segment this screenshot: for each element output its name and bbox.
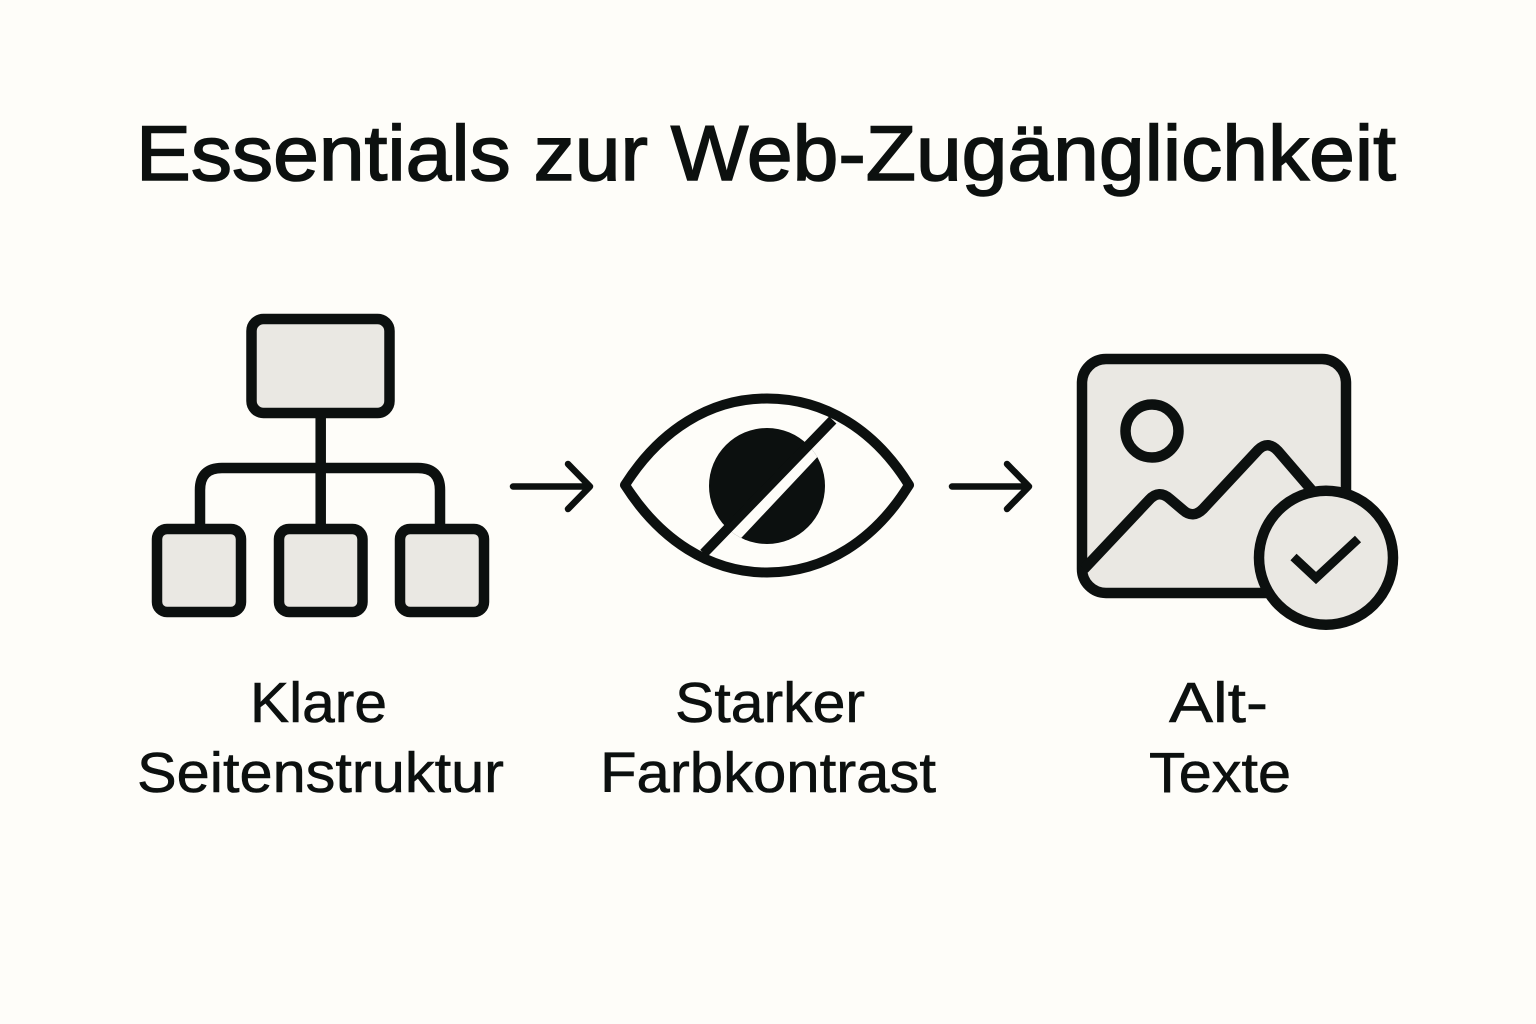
icon: crossed-out eye <box>625 398 909 572</box>
arrow: contrast to alt text <box>952 464 1029 509</box>
label: Klare Seitenstruktur: Klare <box>250 671 387 735</box>
arrow: structure to contrast <box>513 464 590 509</box>
label: Klare Seitenstruktur <box>137 671 504 805</box>
label: Starker Farbkontrast <box>600 671 936 805</box>
icon: page structure hierarchy <box>157 319 484 612</box>
label: Starker Farbkontrast: Farbkontrast <box>600 741 936 805</box>
label: Klare Seitenstruktur: Seitenstruktur <box>137 741 504 805</box>
label: Starker Farbkontrast: Starker <box>675 671 865 735</box>
label: Alt-Texte: Texte <box>1149 741 1291 805</box>
title: Essentials zur Web-Zugänglichkeit <box>136 109 1396 197</box>
label: Alt-Texte: Alt- <box>1169 671 1268 735</box>
label: Alt-Texte <box>1149 671 1291 805</box>
icon: image with check mark <box>1082 359 1393 625</box>
